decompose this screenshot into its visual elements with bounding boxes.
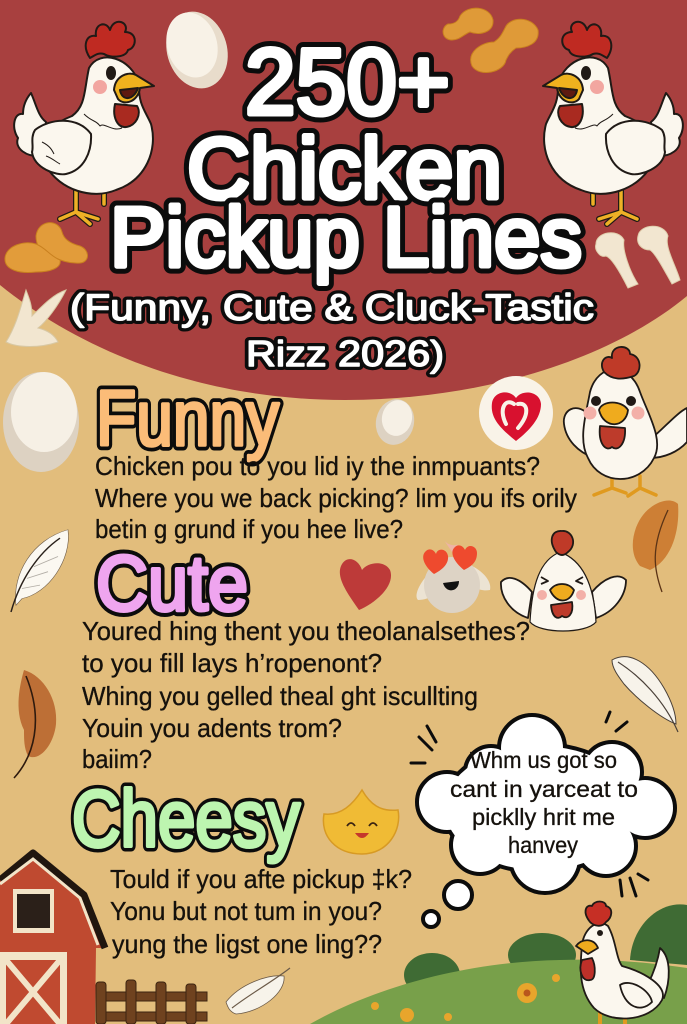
text block: cheesy lines: Tould if you afte pickup ‡k? <box>110 864 412 894</box>
icon: drumsticks top right <box>443 8 538 73</box>
title: 250+ <box>245 29 450 134</box>
title <box>110 29 582 284</box>
thought dots <box>423 881 472 927</box>
icon: barn <box>0 853 105 1024</box>
title: Chicken <box>187 121 502 217</box>
bubble text: Whm us got so <box>470 747 617 773</box>
text block: funny lines: Where you we back picking? lim you ifs orily <box>95 483 577 513</box>
heading: Cheesy: Cheesy <box>72 774 300 863</box>
bubble text: picklly hrit me <box>472 804 615 830</box>
bubble text: cant in yarceat to <box>450 776 638 802</box>
heading: Funny: Funny <box>96 374 279 462</box>
icon: brown feather left <box>14 670 56 778</box>
title: 250+ <box>245 29 450 134</box>
text block: cute lines: Youin you adents trom? <box>82 713 342 743</box>
icon: fence <box>96 980 207 1024</box>
icon: cheese emoji <box>323 790 399 854</box>
icon: orange feather <box>633 501 678 592</box>
subtitle: (Funny, Cute & Cluck-Tastic <box>70 287 594 328</box>
icon: chicken right <box>543 22 683 224</box>
icon: large egg <box>3 372 79 472</box>
subtitle: Rizz 2026) <box>246 333 444 374</box>
icon: egg top <box>157 4 237 96</box>
subtitle <box>70 287 594 374</box>
tail <box>14 93 46 156</box>
speech cloud <box>411 712 673 927</box>
text block: cheesy lines <box>110 864 412 959</box>
bubble text: hanvey <box>508 832 578 858</box>
icon: chicken foot left <box>6 290 66 346</box>
icon: feather bottom <box>226 968 290 1014</box>
cheek <box>93 80 107 94</box>
text block: cute lines: Whing you gelled theal ght iscullting <box>82 681 478 711</box>
legs <box>60 186 104 224</box>
subtitle: Rizz 2026) <box>246 333 444 374</box>
heading: Funny: Funny <box>96 374 279 462</box>
text block: cute lines: Youred hing thent you theolanalsethes? <box>82 616 530 646</box>
icon: nuggets left <box>5 223 87 272</box>
icon: happy chicken <box>501 531 626 631</box>
body <box>41 57 153 194</box>
text block: cute lines <box>82 616 530 774</box>
icon: heart-eyes chick <box>417 540 490 613</box>
subtitle: (Funny, Cute & Cluck-Tastic <box>70 287 594 328</box>
text block: cheesy lines: Yonu but not tum in you? <box>110 896 382 926</box>
eye <box>106 66 116 80</box>
scene: hill and bushes <box>310 904 687 1024</box>
icon: white feather left <box>11 530 68 612</box>
comb <box>86 22 135 58</box>
icon: white feather right <box>612 657 678 732</box>
neck ruff <box>84 114 122 129</box>
title: Pickup Lines <box>110 190 582 284</box>
title: Pickup Lines <box>110 190 582 284</box>
icon: chicken left <box>14 22 154 224</box>
emphasis rays <box>411 712 648 896</box>
red header panel <box>0 0 687 400</box>
heading: Cheesy: Cheesy <box>72 774 300 863</box>
icon: hen bottom right <box>576 902 669 1024</box>
wattle <box>114 104 139 127</box>
heading: Cute: Cute <box>96 539 248 627</box>
wing <box>32 121 91 174</box>
bubble text <box>450 747 638 858</box>
heading: Cute: Cute <box>96 539 248 627</box>
text block: cute lines: baiim? <box>82 744 152 774</box>
icon: heart badge <box>479 376 553 450</box>
text block: cute lines: to you fill lays h’ropenont? <box>82 648 382 678</box>
icon: red heart <box>340 559 391 610</box>
text block: funny lines <box>95 451 577 544</box>
text block: cheesy lines: yung the ligst one ling?? <box>112 929 382 959</box>
text block: funny lines: Chicken pou to you lid iy the inmpuants? <box>95 451 540 481</box>
icon: small egg <box>372 396 418 448</box>
icon: bones right <box>596 226 680 288</box>
icon: waving chicken <box>564 347 687 496</box>
title: Chicken <box>187 121 502 217</box>
text block: funny lines: betin g grund if you hee live? <box>95 514 403 544</box>
beak <box>114 74 154 102</box>
